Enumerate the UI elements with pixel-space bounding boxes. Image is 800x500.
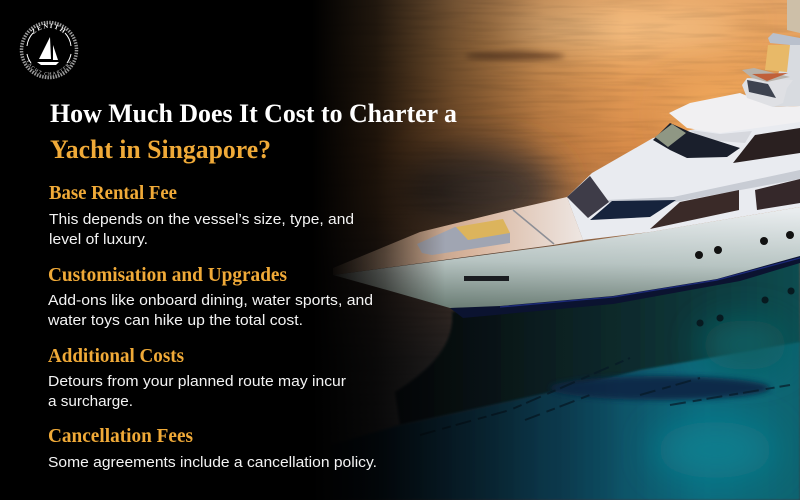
section: customisation and upgrades: Add-ons like onboard dining, water sports, and — [48, 293, 373, 309]
title: Yacht in Singapore? — [50, 135, 271, 164]
yacht — [333, 0, 800, 318]
section: cancellation fees: Some agreements include a cancellation policy. — [48, 455, 377, 471]
section: base rental fee: This depends on the vessel’s size, type, and — [49, 212, 354, 228]
icon: sailboat — [37, 37, 59, 65]
section: additional costs: a surcharge. — [48, 394, 133, 410]
teal lower water — [330, 342, 800, 500]
flybridge house — [774, 45, 800, 107]
logo: Zenith Yacht Charters — [20, 20, 78, 80]
section: additional costs: Detours from your planned route may incur — [48, 374, 346, 390]
section: customisation and upgrades: Customisation and Upgrades — [48, 265, 287, 286]
dark ripple streaks — [420, 358, 790, 435]
section: customisation and upgrades: water toys can hike up the total cost. — [47, 313, 303, 329]
section: base rental fee: Base Rental Fee — [49, 183, 177, 204]
reflected portholes — [700, 291, 791, 323]
section: additional costs — [48, 346, 346, 410]
roof underside — [690, 130, 752, 143]
logo: Zenith Yacht Charters: ZENITH — [31, 24, 66, 34]
title: How Much Does It Cost to Charter a — [50, 99, 457, 128]
section: cancellation fees — [48, 426, 377, 471]
section: base rental fee: level of luxury. — [49, 232, 148, 248]
portholes — [695, 251, 703, 259]
title — [50, 99, 457, 164]
section: customisation and upgrades — [47, 265, 373, 329]
foredeck — [333, 197, 583, 275]
section: base rental fee — [49, 183, 354, 248]
dark yacht reflection on water — [395, 258, 800, 425]
mast — [787, 0, 800, 33]
section: additional costs: Additional Costs — [48, 346, 184, 367]
logo: Zenith Yacht Charters: YACHT CHARTERS — [26, 60, 72, 76]
tender boat — [417, 227, 510, 255]
section: cancellation fees: Cancellation Fees — [48, 426, 193, 447]
windows — [653, 123, 740, 158]
upper deck roof — [669, 93, 800, 133]
superstructure — [567, 118, 800, 240]
hull — [333, 207, 800, 308]
